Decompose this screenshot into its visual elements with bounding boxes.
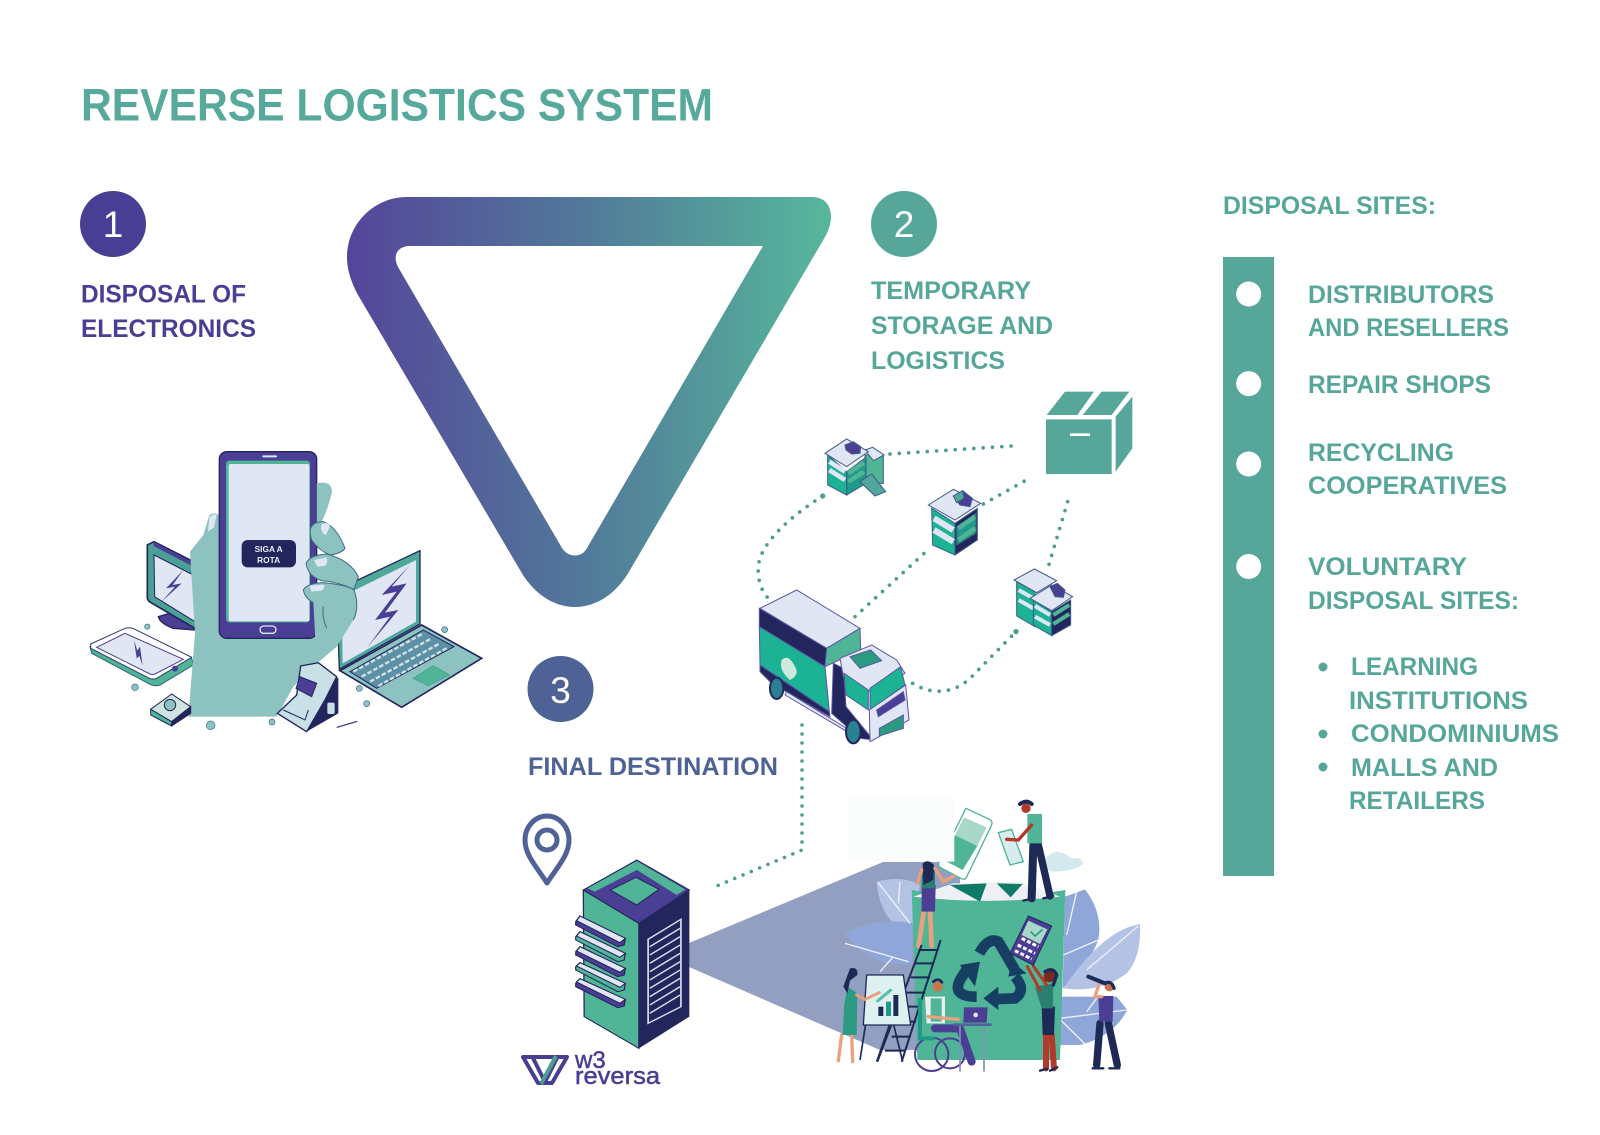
monitor bbox=[147, 542, 197, 630]
step 2 number badge: 2 bbox=[894, 204, 914, 245]
step 3 number badge bbox=[528, 656, 594, 722]
step 3 number badge: 3 bbox=[550, 670, 571, 711]
illustration: temporary storage and truck bbox=[759, 392, 1132, 743]
man in wheelchair bbox=[915, 980, 972, 1071]
step 1 label bbox=[81, 280, 256, 343]
hand bbox=[188, 513, 357, 717]
man with battery bbox=[1007, 802, 1053, 901]
sub-list: RETAILERS bbox=[1349, 787, 1485, 815]
disposal site list bbox=[1308, 281, 1559, 815]
logo wordmark: reversa bbox=[575, 1063, 661, 1090]
light backdrop bbox=[848, 798, 954, 862]
step 1 label: DISPOSAL OF bbox=[81, 280, 246, 308]
step 3 bbox=[528, 656, 778, 781]
collection building 1 bbox=[825, 439, 886, 496]
step 2 number badge bbox=[871, 191, 937, 257]
smartphone with button: ROTA bbox=[257, 555, 280, 565]
logo: w3 reversa bbox=[523, 1047, 661, 1090]
dotted route network bbox=[758, 446, 1068, 691]
sub-list: MALLS AND bbox=[1351, 754, 1498, 782]
server body bbox=[583, 890, 639, 1048]
server vent panel bbox=[648, 919, 681, 1023]
site: voluntary disposal sites bbox=[1308, 553, 1519, 615]
sub-list: INSTITUTIONS bbox=[1349, 687, 1528, 715]
step 2 label: LOGISTICS bbox=[871, 347, 1005, 375]
site: distributors and resellers: DISTRIBUTORS bbox=[1308, 281, 1494, 309]
sub-list: LEARNING bbox=[1351, 653, 1478, 681]
step 2 label bbox=[871, 277, 1053, 375]
site: distributors and resellers: AND RESELLERS bbox=[1308, 314, 1509, 342]
man with binoculars bbox=[1088, 977, 1119, 1068]
laptop bbox=[337, 551, 482, 707]
step 1 label: ELECTRONICS bbox=[81, 315, 256, 343]
step 2 label: STORAGE AND bbox=[871, 312, 1053, 340]
disposal sites heading: DISPOSAL SITES: bbox=[1223, 192, 1436, 220]
step 1 number badge bbox=[80, 191, 146, 257]
logo wordmark: w3 bbox=[574, 1047, 606, 1074]
logo wordmark bbox=[574, 1047, 661, 1090]
site: recycling cooperatives: RECYCLING bbox=[1308, 439, 1454, 467]
step 2 label: TEMPORARY bbox=[871, 277, 1031, 305]
route end markers bbox=[820, 493, 1019, 634]
scattered debris bbox=[132, 624, 448, 730]
small register device bbox=[277, 663, 338, 732]
bin bbox=[912, 882, 1065, 1060]
big phone bbox=[938, 808, 992, 879]
recycling symbol bbox=[958, 941, 1027, 1010]
battery bbox=[998, 829, 1023, 865]
site: repair shops: REPAIR SHOPS bbox=[1308, 371, 1491, 399]
central gradient triangle bbox=[347, 197, 831, 607]
fingers bbox=[208, 483, 358, 663]
site: voluntary disposal sites: VOLUNTARY bbox=[1308, 553, 1467, 581]
desk and laptop bbox=[953, 1007, 992, 1072]
logo mark bbox=[523, 1056, 567, 1084]
cardboard box bbox=[1046, 392, 1132, 474]
site: distributors and resellers bbox=[1308, 281, 1509, 342]
cloud bbox=[1043, 852, 1083, 872]
presenting woman bbox=[838, 968, 879, 1062]
collection building 2 bbox=[928, 489, 981, 555]
server tower bbox=[576, 860, 689, 1048]
step 3 label: FINAL DESTINATION bbox=[528, 753, 778, 781]
projection beam bbox=[689, 862, 960, 1050]
ladder bbox=[877, 940, 941, 1062]
woman lifting calculator bbox=[1027, 966, 1057, 1071]
leaves bbox=[845, 879, 1140, 1045]
smartphone with button: SIGA A bbox=[255, 544, 283, 554]
delivery truck bbox=[759, 590, 909, 743]
site: recycling cooperatives: COOPERATIVES bbox=[1308, 472, 1507, 500]
presentation board bbox=[860, 975, 911, 1062]
step 1 bbox=[80, 191, 256, 343]
site: recycling cooperatives bbox=[1308, 439, 1507, 500]
bar markers bbox=[1236, 282, 1261, 579]
small chip box bbox=[151, 694, 191, 726]
illustration: hand holding phone with e-waste bbox=[90, 452, 482, 732]
dotted route to final destination bbox=[712, 725, 802, 888]
sub-list bbox=[1318, 653, 1559, 815]
title: REVERSE LOGISTICS SYSTEM bbox=[81, 80, 713, 130]
server drawers bbox=[576, 916, 625, 1008]
sub-list: CONDOMINIUMS bbox=[1351, 720, 1559, 748]
broken smartphone bbox=[90, 628, 193, 686]
smartphone with button bbox=[219, 452, 317, 638]
collection building 3 bbox=[1014, 569, 1073, 636]
illustration: recycling bin and people bbox=[838, 798, 1140, 1072]
woman on ladder bbox=[917, 861, 954, 946]
step 2 bbox=[871, 191, 1053, 375]
step 1 number badge: 1 bbox=[103, 204, 123, 245]
panel: disposal sites bar bbox=[1223, 257, 1274, 876]
handheld calculator bbox=[1010, 916, 1052, 965]
site: voluntary disposal sites: DISPOSAL SITES: bbox=[1308, 587, 1519, 615]
location pin icon bbox=[525, 816, 569, 883]
